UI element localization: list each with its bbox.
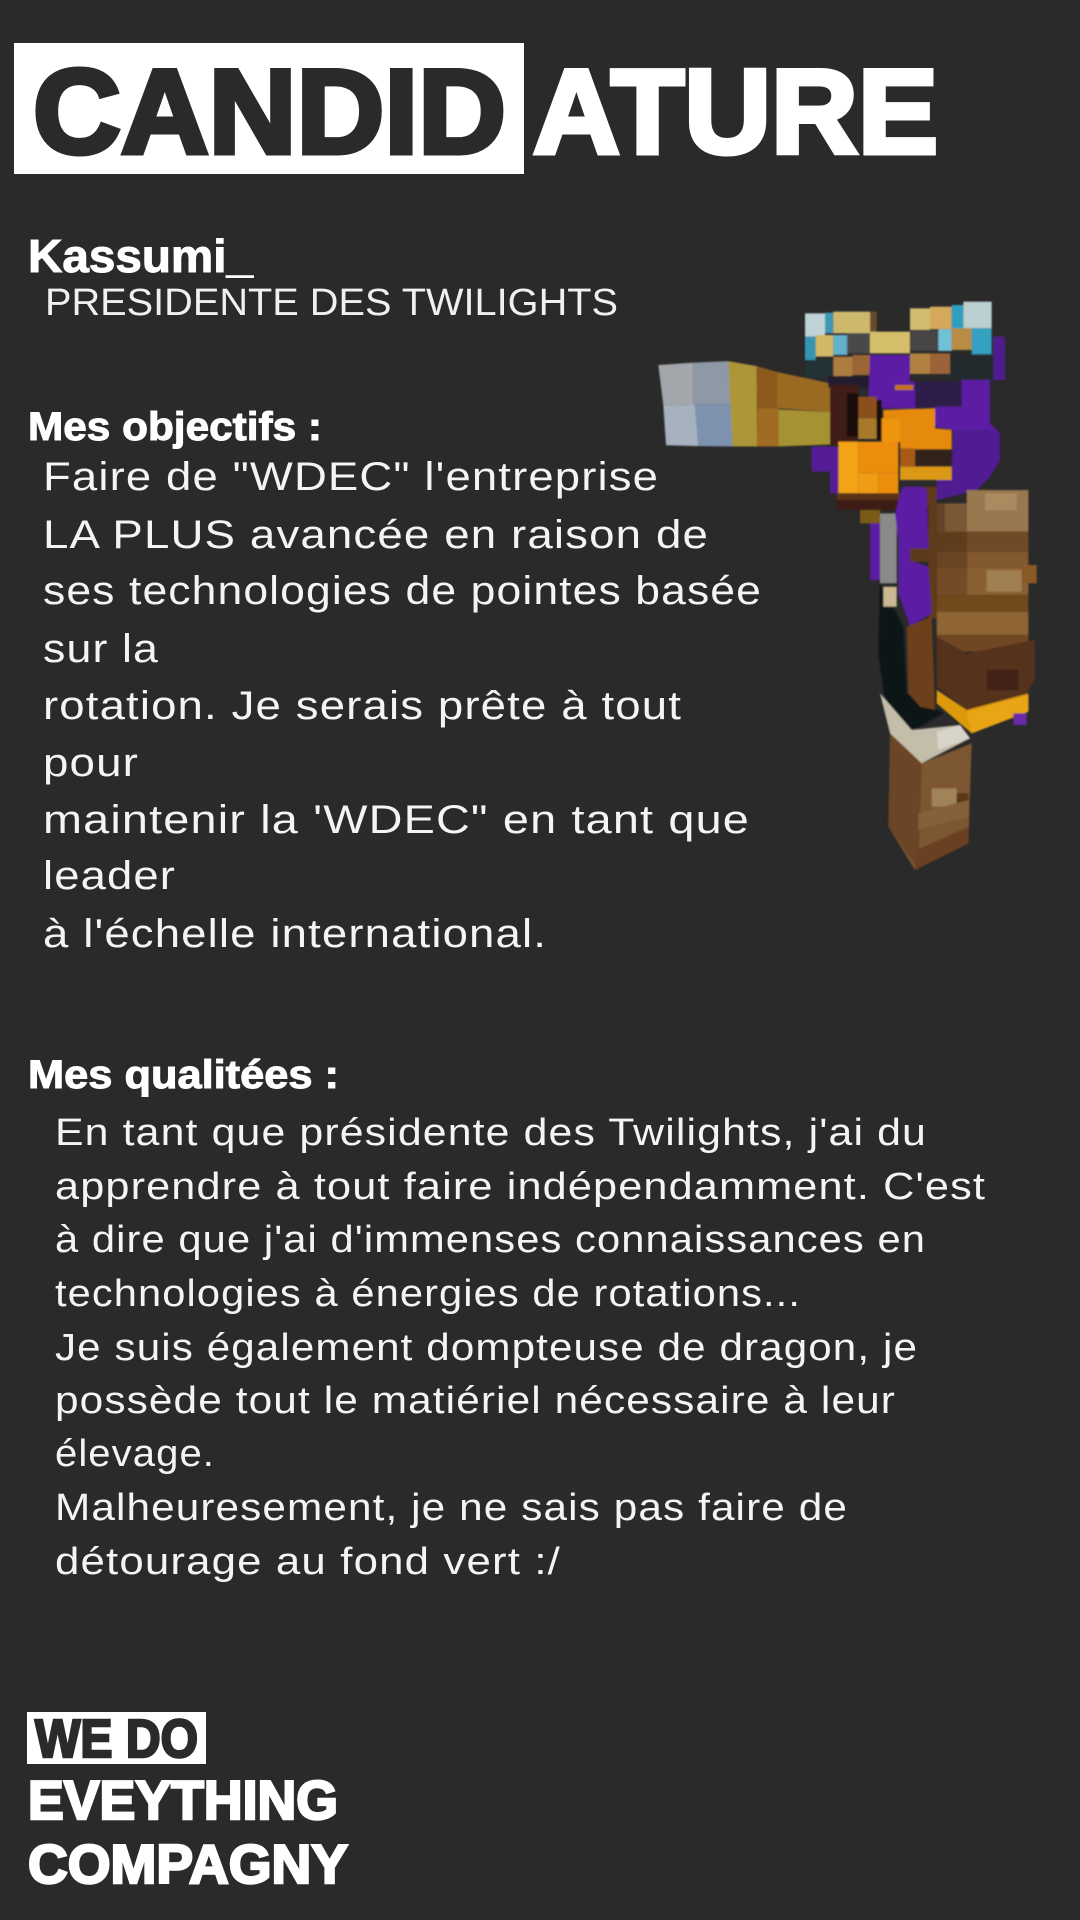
qualities text: apprendre à tout faire indépendamment. C'est xyxy=(55,1166,986,1208)
objectives text: LA PLUS avancée en raison de xyxy=(43,513,709,557)
qualities text: détourage au fond vert :/ xyxy=(55,1541,561,1583)
qualities text: Je suis également dompteuse de dragon, je xyxy=(55,1327,918,1369)
logo line: COMPAGNY: COMPAGNY xyxy=(28,1833,348,1895)
torso xyxy=(870,488,943,730)
heading: objectives: Mes objectifs : xyxy=(28,405,322,449)
qualities text: élevage. xyxy=(55,1433,215,1475)
objectives text: pour xyxy=(43,741,139,785)
logo line: EVEYTHING: EVEYTHING xyxy=(28,1769,338,1831)
objectives text: à l'échelle international. xyxy=(43,912,547,956)
title highlight box xyxy=(14,43,524,174)
qualities text xyxy=(55,1112,986,1583)
qualities text: à dire que j'ai d'immenses connaissances en xyxy=(55,1219,926,1261)
objectives text: sur la xyxy=(43,627,159,671)
telescope xyxy=(658,361,830,446)
candidate name: Kassumi_ xyxy=(28,230,253,282)
logo line: WE DO: WE DO xyxy=(35,1709,198,1769)
candidate role: PRESIDENTE DES TWILIGHTS xyxy=(45,282,618,324)
orange muzzle xyxy=(837,408,952,510)
objectives text: maintenir la 'WDEC" en tant que xyxy=(43,798,750,842)
title word part: ATURE: ATURE xyxy=(533,45,938,179)
head xyxy=(805,302,1005,510)
icon: blocky character with telescope xyxy=(658,302,1037,870)
hair xyxy=(812,337,1005,510)
objectives text: Faire de "WDEC" l'entreprise xyxy=(43,455,659,499)
qualities text: En tant que présidente des Twilights, j'ai du xyxy=(55,1112,927,1154)
chin shadow xyxy=(860,510,880,523)
title xyxy=(14,43,938,179)
heading: qualities: Mes qualitées : xyxy=(28,1053,339,1097)
leg and cuff xyxy=(880,693,972,870)
objectives text: leader xyxy=(43,854,176,898)
qualities text: technologies à énergies de rotations... xyxy=(55,1273,801,1315)
eye-piece of telescope xyxy=(830,385,882,445)
backpack xyxy=(937,490,1037,733)
goggles xyxy=(805,302,993,380)
qualities text: possède tout le matiériel nécessaire à leur xyxy=(55,1380,896,1422)
qualities text: Malheuresement, je ne sais pas faire de xyxy=(55,1487,848,1529)
objectives text xyxy=(43,455,762,956)
body xyxy=(860,488,1037,870)
objectives text: rotation. Je serais prête à tout xyxy=(43,684,682,728)
objectives text: ses technologies de pointes basée xyxy=(43,569,762,613)
title word part: CANDID: CANDID xyxy=(33,45,506,179)
logo highlight box xyxy=(27,1712,206,1764)
footer logo xyxy=(27,1709,348,1895)
